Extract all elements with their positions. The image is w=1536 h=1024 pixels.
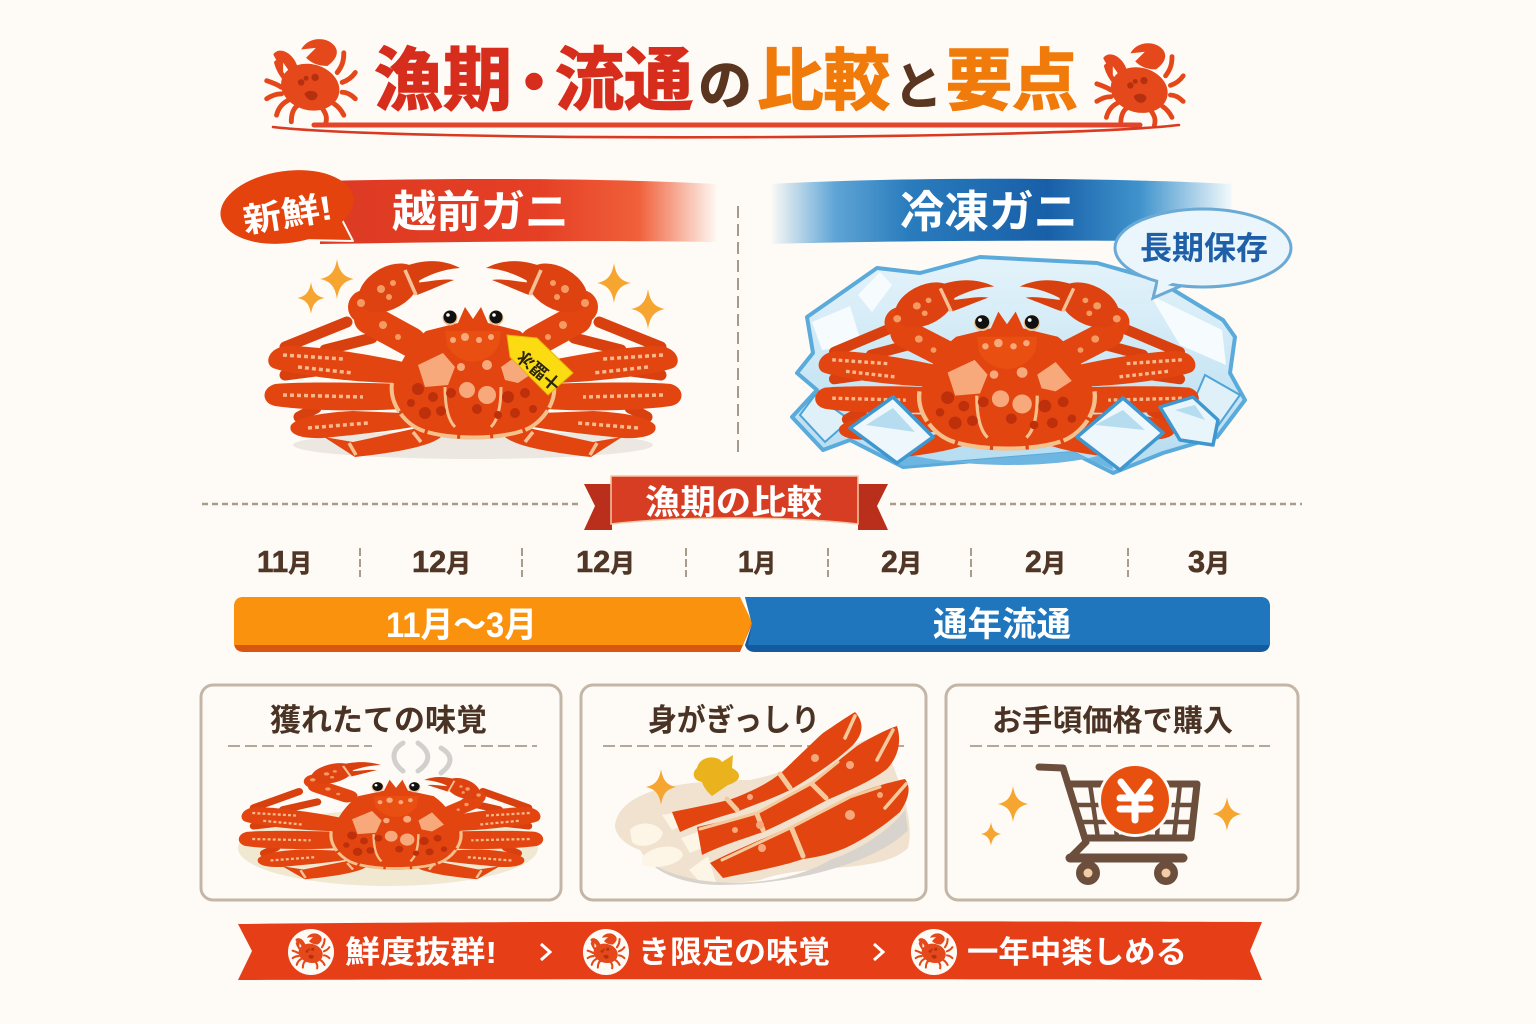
panel: affordable — [946, 685, 1298, 900]
timeline bar: frozen all-year: 通年流通 — [933, 606, 1071, 644]
month labels: 3月 — [1188, 544, 1230, 579]
timeline bar: Echizen season: 11月～3月 — [386, 606, 537, 645]
icon: small crab left of title — [267, 39, 355, 123]
icon: sparkles — [981, 786, 1241, 846]
month labels: 2月 — [881, 544, 922, 579]
arrow — [541, 944, 550, 960]
heading band: frozen crab: 冷凍ガニ — [900, 188, 1078, 237]
item: enjoy all year — [911, 929, 1187, 975]
ribbon: season comparison: 漁期の比較 — [645, 484, 822, 522]
crab leg meat — [630, 812, 716, 882]
title: 要点 — [946, 44, 1078, 119]
callout: long-term storage: 長期保存 — [1140, 230, 1268, 266]
icon: sparkles — [297, 259, 665, 329]
title — [374, 42, 1078, 119]
icon: steam — [394, 743, 450, 773]
heading band: Echizen crab: 越前ガニ — [392, 188, 569, 237]
callout: long-term storage — [1115, 209, 1291, 298]
leg highlights — [700, 716, 906, 860]
month labels: 12月 — [412, 544, 471, 579]
crab shadow — [293, 431, 653, 459]
timeline bar: frozen all-year — [745, 597, 1270, 652]
timeline bar: Echizen season — [234, 597, 752, 652]
item: outstanding freshness — [288, 929, 497, 975]
crab illustration — [815, 273, 1199, 458]
heading: affordable: お手頃価格で購入 — [992, 705, 1233, 738]
plate shadow — [650, 810, 908, 885]
heading band: frozen crab — [770, 179, 1232, 244]
icon: small crab right of title — [1097, 43, 1183, 125]
plate background — [615, 735, 910, 883]
panel: frozen crab — [770, 179, 1291, 473]
panel: Echizen crab — [216, 162, 718, 459]
crab illustration — [264, 253, 682, 457]
month labels — [257, 544, 1230, 579]
section divider lines — [202, 503, 1302, 505]
month labels: 1月 — [738, 544, 776, 579]
icon: yellow tag: 十盟冰 — [514, 347, 565, 394]
item: enjoy all year: 一年中楽しめる — [967, 935, 1187, 970]
arrow — [874, 944, 883, 960]
ribbon: season comparison — [584, 476, 888, 530]
heading: fresh taste: 獲れたての味覚 — [270, 703, 487, 738]
item: limited-season taste: き限定の味覚 — [638, 935, 830, 970]
month labels: 12月 — [576, 544, 635, 579]
icon: shopping cart with yen — [1039, 763, 1197, 885]
title underline — [273, 125, 1179, 137]
callout: fresh: 新鮮! — [240, 189, 335, 241]
center vertical divider — [737, 206, 739, 452]
callout: fresh — [216, 162, 358, 252]
ice cubes — [850, 397, 1218, 470]
bottom banner — [238, 921, 1262, 980]
title: 漁期 — [374, 42, 512, 119]
plate shadow — [238, 810, 538, 886]
crab illustration — [239, 759, 543, 879]
heading band: Echizen crab — [320, 179, 718, 244]
title: ・ — [503, 50, 565, 119]
month labels: 2月 — [1025, 544, 1066, 579]
leg spots — [732, 754, 883, 852]
ice block — [792, 257, 1245, 473]
month labels: 11月 — [257, 544, 312, 579]
panel: fresh taste — [201, 685, 561, 900]
title: と — [894, 59, 942, 115]
title: の — [698, 56, 752, 116]
item: limited-season taste — [583, 929, 830, 975]
panel: meaty legs — [581, 685, 926, 900]
crab legs — [672, 712, 909, 878]
title: 比較 — [757, 44, 890, 119]
icon: yellow tag — [507, 335, 573, 395]
title: 流通 — [555, 42, 693, 119]
item: outstanding freshness: 鮮度抜群! — [345, 935, 497, 970]
icon: sparkle and butter — [646, 755, 739, 805]
heading: meaty: 身がぎっしり — [648, 703, 820, 738]
